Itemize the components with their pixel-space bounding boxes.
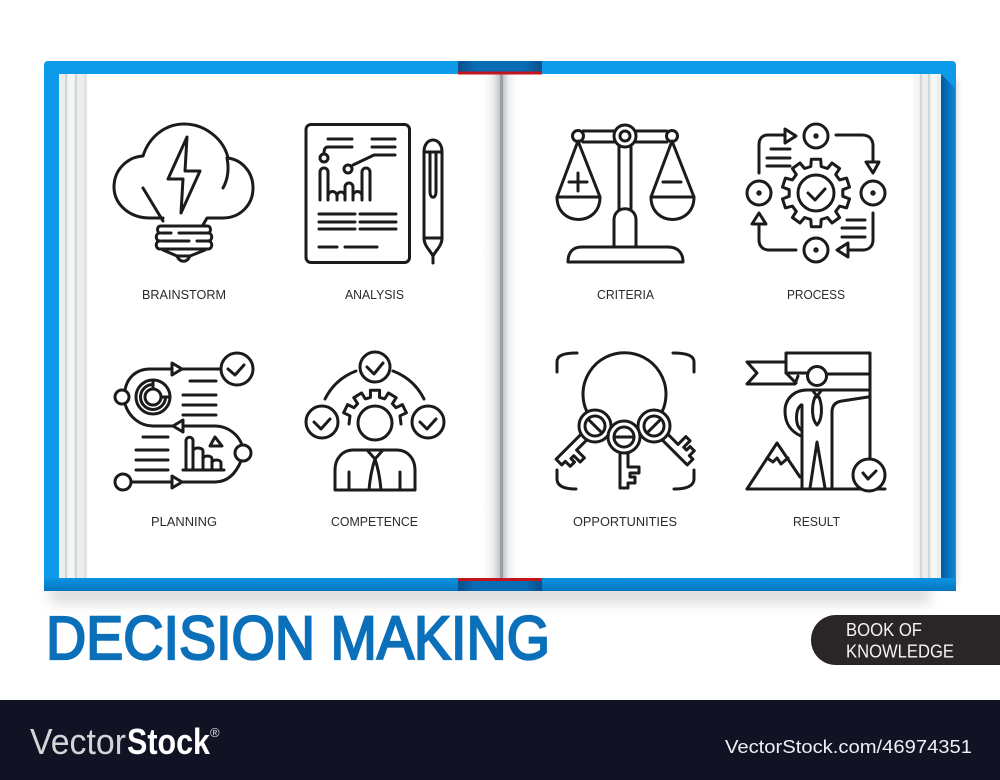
panel: process [747,124,885,302]
badge: book of knowledge: KNOWLEDGE [846,642,954,662]
badge: book of knowledge: BOOK OF [846,620,922,640]
label: opportunities: OPPORTUNITIES [573,515,677,529]
icon: light bulb cloud [114,124,253,261]
panel: criteria [557,125,694,302]
left page edges [59,74,87,578]
label: brainstorm: BRAINSTORM [142,288,226,302]
icon: bunch of keys [548,353,701,489]
label: analysis: ANALYSIS [345,288,404,302]
image id: VectorStock.com/46974351 [725,737,972,757]
panel: planning [115,353,253,529]
icon: balance scales [557,125,694,262]
footer bar [0,700,1000,780]
book cover [44,61,956,591]
logo: vectorstock: ® [210,725,220,740]
label: criteria: CRITERIA [597,288,655,302]
icon: planning roadmap [115,353,253,490]
right page edges [913,74,941,578]
icon: competent person with gear [306,352,444,490]
label: planning: PLANNING [151,515,217,529]
panel: competence [306,352,444,529]
badge: book of knowledge [811,615,1000,665]
panel: analysis [306,124,442,302]
logo: vectorstock: Stock [127,721,211,762]
book [44,61,958,602]
icon: document with pen [306,124,442,263]
title: DECISION MAKING [46,604,550,672]
label: competence: COMPETENCE [331,515,418,529]
bottom spine band [458,578,542,591]
top spine band [458,61,542,74]
label: process: PROCESS [787,288,845,302]
panel: brainstorm [114,124,253,302]
pages [59,74,941,578]
logo: vectorstock [30,721,220,762]
panel: opportunities [548,353,701,529]
label: result: RESULT [793,515,840,529]
spine shading [480,74,521,578]
icon: person with flag and mountain [747,353,885,491]
logo: vectorstock: Vector [30,721,126,762]
panel: result [747,353,885,529]
icon: process cycle with gear [747,124,885,262]
